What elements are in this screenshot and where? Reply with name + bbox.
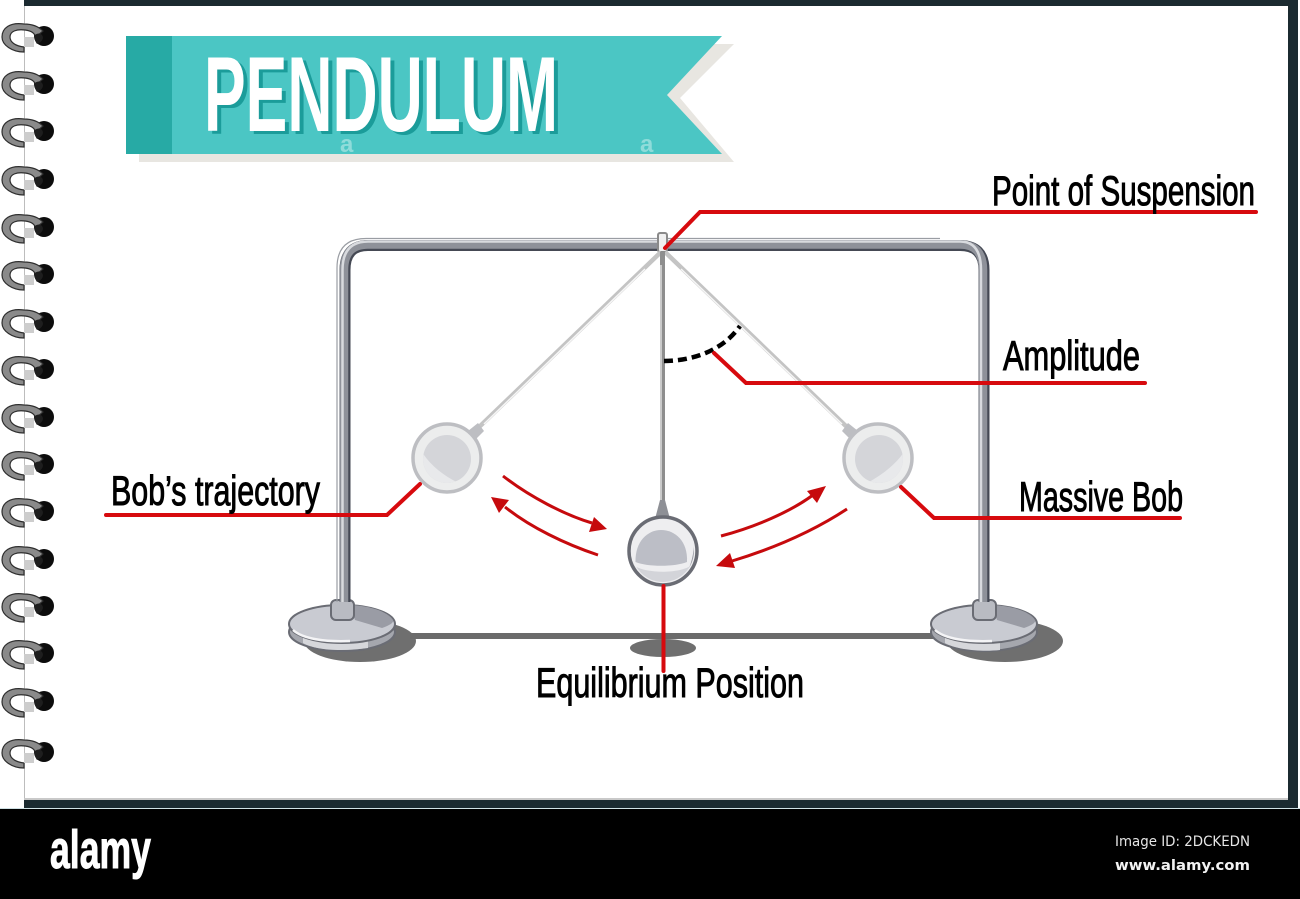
spiral binding rings xyxy=(2,24,54,768)
right pendulum xyxy=(665,252,912,492)
arrow: to left xyxy=(491,497,598,555)
label: massive bob: Massive Bob xyxy=(1019,473,1183,520)
title shadow: PENDULUM xyxy=(208,37,562,157)
arrow: to right xyxy=(721,486,826,536)
base shadows xyxy=(304,620,1063,662)
label: amplitude: Amplitude xyxy=(1003,332,1140,379)
title banner: a xyxy=(640,131,654,158)
trajectory arrows xyxy=(491,476,847,568)
left pendulum xyxy=(413,252,661,492)
website: www.alamy.com xyxy=(1115,858,1250,874)
image id: Image ID: 2DCKEDN xyxy=(1115,834,1250,850)
title banner: a xyxy=(340,131,354,158)
label: equilibrium position: Equilibrium Position xyxy=(536,659,804,706)
arrow: to centre from right xyxy=(716,509,847,568)
centre pendulum xyxy=(629,252,700,585)
pivot xyxy=(658,233,667,252)
footer bar xyxy=(0,808,1300,899)
callout lines xyxy=(106,212,1256,671)
left base xyxy=(289,600,395,651)
arrow: to centre from left xyxy=(503,476,607,532)
floor bar xyxy=(410,633,940,639)
label: bob's trajectory: Bob’s trajectory xyxy=(111,467,320,514)
logo: alamy: alamy xyxy=(50,820,151,880)
frame xyxy=(337,238,940,602)
amplitude arc xyxy=(664,326,740,361)
title: PENDULUM xyxy=(204,34,558,154)
pendulum stand xyxy=(289,233,1063,662)
title banner xyxy=(126,34,734,162)
right base xyxy=(931,600,1037,651)
